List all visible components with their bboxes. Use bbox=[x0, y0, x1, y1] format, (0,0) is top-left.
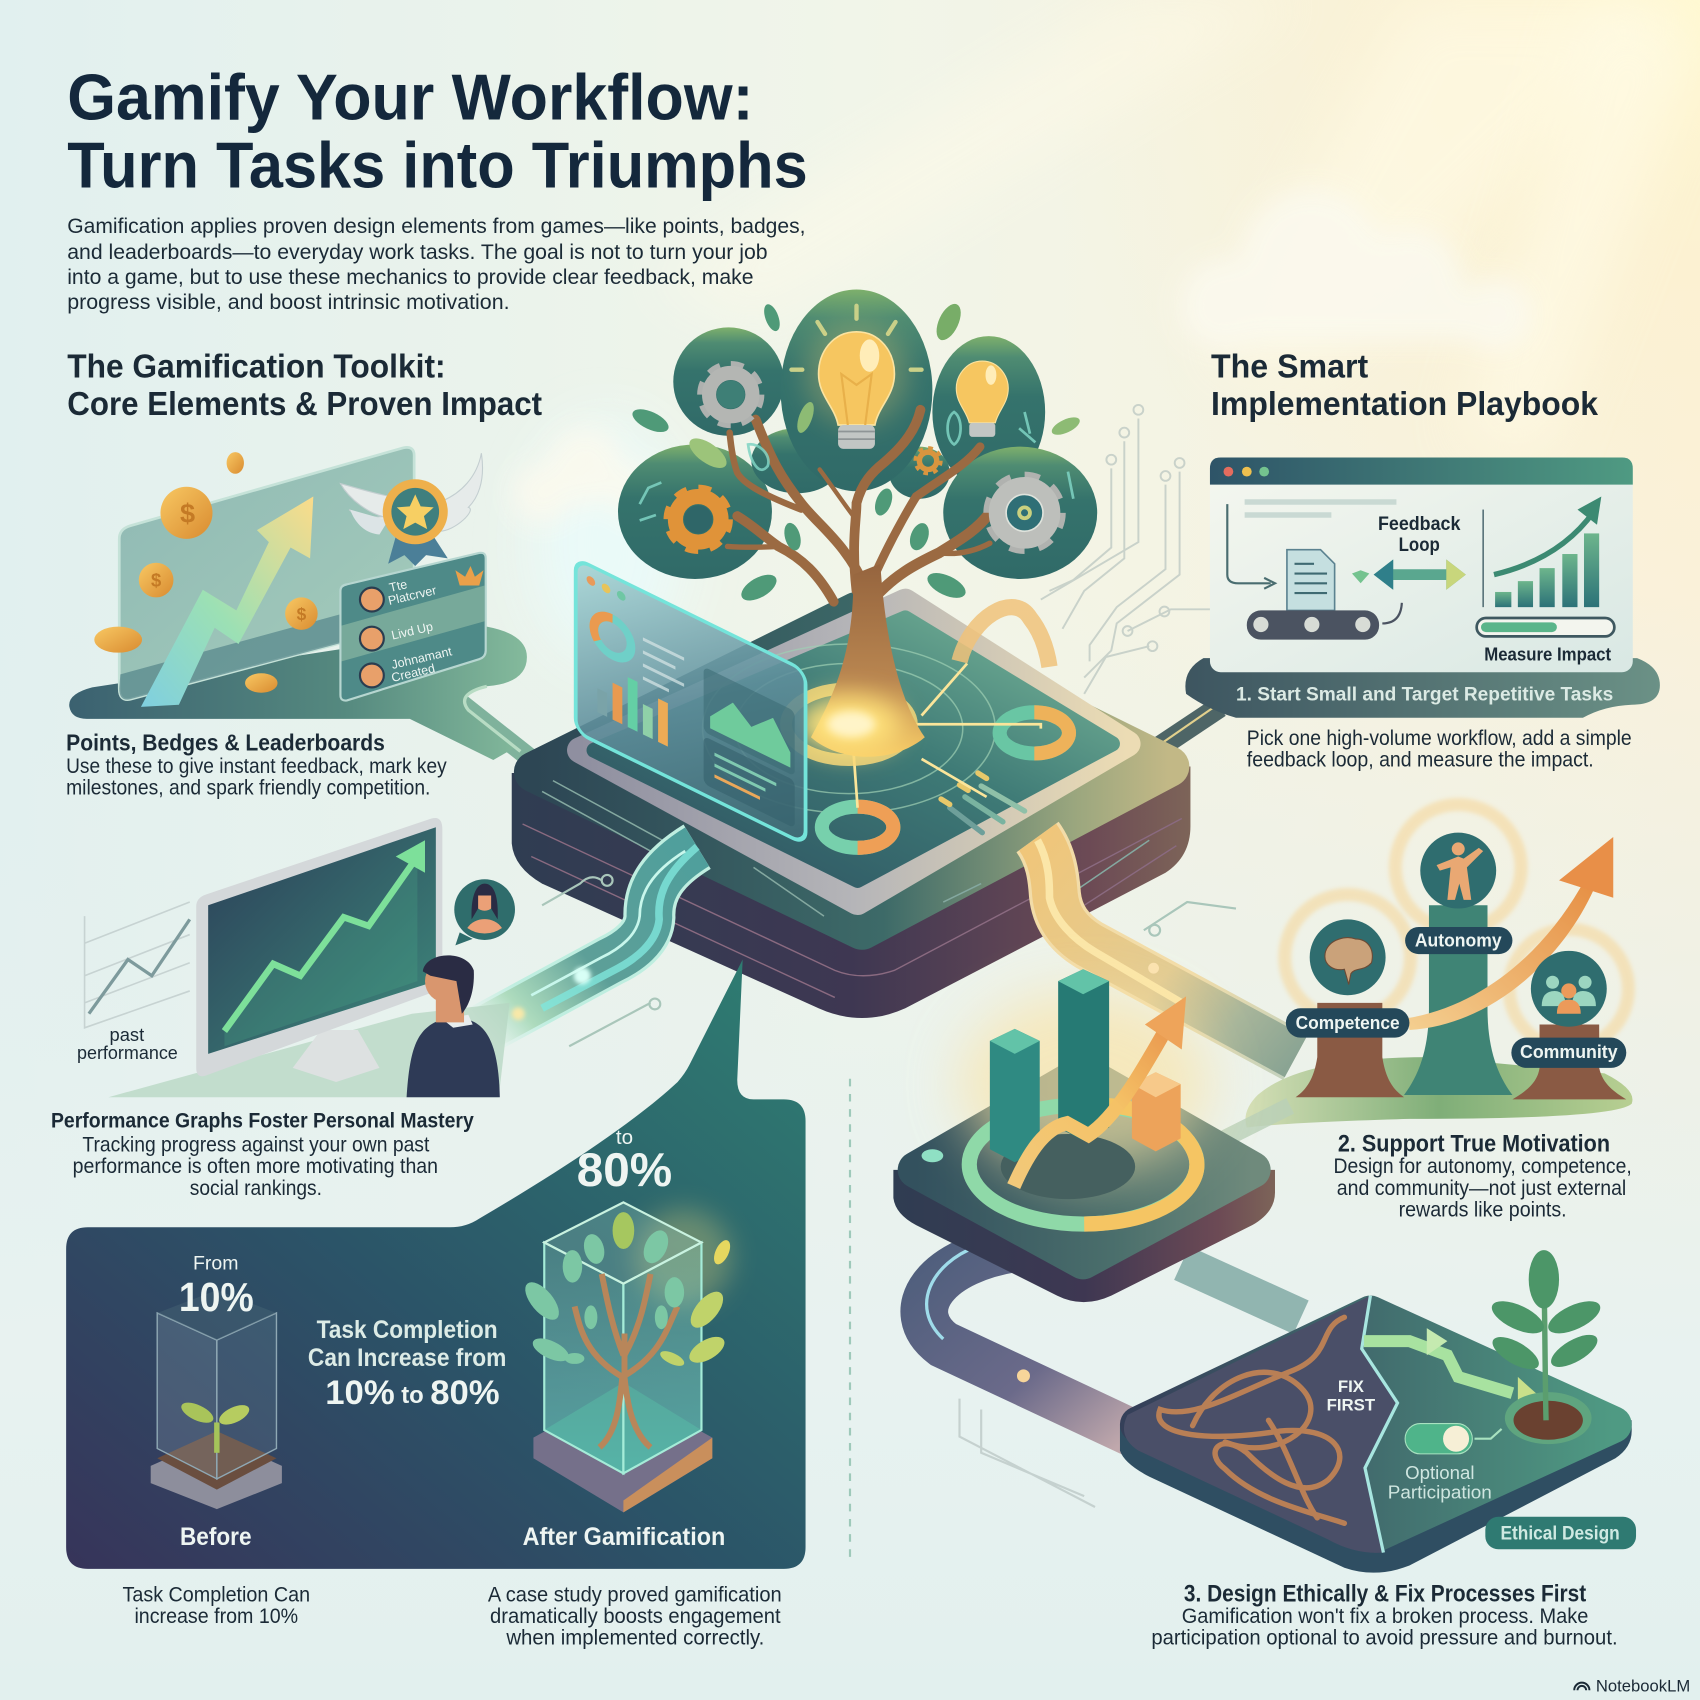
grey gear bbox=[703, 366, 759, 423]
window dots bbox=[587, 575, 626, 602]
rising arrow bbox=[141, 497, 313, 707]
text: points badges: Use these to give instant feedback, mark key bbox=[66, 755, 447, 778]
rank labels: Tte bbox=[388, 577, 409, 595]
intro paragraph bbox=[67, 213, 806, 314]
panel headline bbox=[308, 1316, 506, 1412]
glass dashboard panel bbox=[576, 558, 806, 844]
text: past performance label bbox=[77, 1024, 178, 1063]
panel headline: 80% bbox=[430, 1374, 500, 1412]
gold flow road bbox=[1038, 837, 1296, 1057]
bar one bbox=[990, 1029, 1040, 1162]
glow bbox=[960, 992, 1209, 1176]
panel headline: 10% bbox=[325, 1374, 395, 1412]
small orange gear bbox=[916, 449, 940, 473]
ethical design pill: Ethical Design bbox=[1501, 1524, 1620, 1545]
competence pill: Competence bbox=[1296, 1012, 1400, 1033]
plate top bbox=[1138, 1314, 1613, 1534]
green path arrow bbox=[1364, 1328, 1540, 1409]
base glow bbox=[797, 696, 901, 752]
intro paragraph: progress visible, and boost intrinsic motivation. bbox=[67, 289, 510, 314]
rank labels: Platcrver bbox=[387, 583, 438, 608]
platform rim bbox=[580, 602, 1128, 902]
optional participation label bbox=[1388, 1462, 1492, 1502]
text: step 1 title: 1. Start Small and Target Repetitive Tasks bbox=[1236, 683, 1613, 705]
center stump bbox=[1404, 905, 1512, 1095]
connector: step 1 to platform bbox=[1151, 707, 1220, 752]
leaderboard card bbox=[340, 553, 486, 701]
platform middle layer bbox=[535, 613, 1169, 929]
before percent: 10% bbox=[179, 1274, 254, 1320]
avatar bubble bbox=[454, 879, 515, 945]
text: before caption: Task Completion Can bbox=[123, 1583, 310, 1606]
bar three bbox=[1132, 1072, 1181, 1151]
performance graph illustration bbox=[85, 818, 515, 1097]
competence sphere bbox=[1310, 919, 1386, 995]
text: step 3: 3. Design Ethically & Fix Processes First bbox=[1184, 1580, 1586, 1607]
text: step 1 body bbox=[1247, 727, 1632, 772]
after percent: 80% bbox=[577, 1144, 672, 1197]
ring bbox=[969, 1105, 1197, 1224]
text: performance graphs: performance is often more motivating than bbox=[73, 1155, 438, 1178]
text: step 2: Design for autonomy, competence, bbox=[1334, 1155, 1632, 1178]
glow lines bbox=[853, 664, 1041, 808]
text: performance graphs: Tracking progress against your own past bbox=[82, 1133, 429, 1156]
coin symbols bbox=[151, 498, 307, 624]
NotebookLM mark: NotebookLM bbox=[1596, 1676, 1690, 1695]
crown bbox=[455, 566, 484, 585]
large grey gear bbox=[990, 478, 1059, 548]
text: case study: dramatically boosts engagement bbox=[490, 1605, 781, 1628]
optional participation label: Participation bbox=[1388, 1481, 1492, 1502]
large bulb bbox=[804, 322, 909, 449]
central platform bbox=[482, 602, 1296, 1057]
leaves bbox=[629, 300, 1082, 606]
seam bbox=[1362, 1296, 1398, 1553]
left stump bbox=[1296, 1003, 1404, 1097]
orange gear bbox=[669, 490, 727, 549]
text: feedback loop: Feedback bbox=[1378, 513, 1461, 535]
community sphere bbox=[1531, 951, 1607, 1027]
browser dots bbox=[1224, 467, 1269, 476]
monitor trend line bbox=[224, 840, 425, 1046]
competence pill bbox=[1286, 1008, 1409, 1038]
text: step 2: and community—not just external bbox=[1337, 1177, 1626, 1200]
platform marks bbox=[941, 773, 1025, 833]
before caption: Before bbox=[180, 1523, 252, 1551]
plant bbox=[1487, 1250, 1605, 1420]
heading: toolkit: Core Elements & Proven Impact bbox=[67, 386, 542, 423]
heading: toolkit: The Gamification Toolkit: bbox=[67, 348, 446, 385]
text: performance graphs: Performance Graphs Foster Personal Mastery bbox=[51, 1108, 474, 1133]
text: performance graphs bbox=[51, 1108, 474, 1200]
branches bbox=[727, 410, 990, 602]
text: step 3 bbox=[1151, 1580, 1618, 1650]
text: step 3: participation optional to avoid pressure and burnout. bbox=[1151, 1627, 1618, 1650]
side wall bbox=[893, 1170, 1275, 1302]
dark half bbox=[1124, 1296, 1398, 1553]
after glass cube with tree bbox=[519, 1202, 733, 1512]
thin road traces bbox=[542, 875, 1236, 1046]
dashboard bars bbox=[597, 662, 668, 747]
screen arcs bbox=[703, 644, 995, 813]
text: step 2: 2. Support True Motivation bbox=[1338, 1130, 1610, 1157]
after label to: to bbox=[616, 1126, 633, 1149]
text: step 2: rewards like points. bbox=[1399, 1198, 1567, 1221]
step 1 banner bbox=[1185, 658, 1660, 718]
cloud background bbox=[512, 189, 1533, 524]
teal flow road bbox=[482, 847, 697, 1030]
monitor frame bbox=[196, 818, 442, 1076]
text: step 2 bbox=[1334, 1130, 1632, 1221]
text: points badges bbox=[66, 729, 447, 800]
bulb rays bbox=[791, 306, 922, 370]
circuit lines bbox=[1041, 405, 1210, 694]
top surface bbox=[916, 1073, 1252, 1261]
coin symbols: $ bbox=[297, 604, 307, 624]
rank labels: Created bbox=[390, 661, 436, 685]
platform base layer bbox=[512, 767, 1190, 1018]
monitor screen bbox=[208, 827, 436, 1054]
ground wedge bbox=[108, 1003, 510, 1097]
intro paragraph: Gamification applies proven design elements from games—like points, badges, bbox=[67, 213, 806, 238]
text: case study: A case study proved gamification bbox=[488, 1583, 782, 1606]
intro paragraph: into a game, but to use these mechanics to provide clear feedback, make bbox=[67, 264, 754, 289]
lower ring bbox=[822, 807, 893, 848]
right stump bbox=[1512, 1025, 1626, 1099]
small glows bbox=[922, 1149, 943, 1162]
ethical design pill bbox=[1485, 1517, 1636, 1549]
FIX FIRST label: FIX bbox=[1338, 1377, 1365, 1396]
past performance chart bbox=[85, 902, 190, 1028]
tree bbox=[618, 289, 1097, 757]
FIX FIRST label: FIRST bbox=[1327, 1396, 1376, 1415]
tangled wire bbox=[1159, 1317, 1344, 1523]
bar two bbox=[1058, 969, 1109, 1141]
text: before caption bbox=[123, 1583, 310, 1628]
glass board bbox=[119, 447, 414, 700]
heading: playbook: Implementation Playbook bbox=[1211, 386, 1598, 423]
text: step 1 body: Pick one high-volume workflow, add a simple bbox=[1247, 727, 1632, 750]
middle platform bbox=[893, 969, 1275, 1302]
heading: playbook bbox=[1211, 348, 1598, 423]
toggle switch bbox=[1405, 1424, 1502, 1454]
title: Turn Tasks into Triumphs bbox=[67, 129, 808, 202]
optional participation label: Optional bbox=[1405, 1462, 1474, 1483]
dashed divider bbox=[849, 1079, 851, 1561]
case study panel bbox=[66, 960, 806, 1569]
avatars bbox=[360, 588, 384, 687]
before label from: From bbox=[193, 1253, 239, 1275]
connector: toolkit to platform bbox=[460, 703, 548, 772]
bottom plate bbox=[1120, 1250, 1636, 1573]
text: step 1 body: feedback loop, and measure the impact. bbox=[1247, 749, 1594, 772]
before glass cube bbox=[151, 1290, 282, 1509]
community pill: Community bbox=[1520, 1041, 1618, 1062]
platform screen bbox=[594, 618, 1112, 880]
FIX FIRST label bbox=[1327, 1377, 1376, 1415]
donut on platform bbox=[1000, 712, 1069, 754]
text: past performance label: past bbox=[110, 1024, 144, 1045]
title: Gamify Your Workflow: bbox=[67, 60, 754, 133]
heading: toolkit bbox=[67, 348, 542, 423]
orange rising arrow bbox=[1408, 837, 1613, 1030]
text: step 3: Gamification won't fix a broken process. Make bbox=[1182, 1605, 1588, 1628]
coins bbox=[94, 452, 318, 693]
browser header bbox=[1210, 458, 1633, 485]
autonomy pill: Autonomy bbox=[1415, 929, 1502, 950]
impact chart bbox=[1483, 497, 1601, 607]
rank labels bbox=[387, 577, 454, 685]
coin symbols: $ bbox=[180, 498, 195, 529]
autonomy pill bbox=[1405, 927, 1512, 954]
small tech glyphs bbox=[640, 412, 1073, 520]
connector to bottom plate bbox=[1182, 1263, 1301, 1317]
medal bbox=[340, 453, 483, 566]
monitor stand bbox=[293, 1030, 379, 1082]
rank labels: Livd Up bbox=[390, 619, 434, 643]
panel headline: Can Increase from bbox=[308, 1344, 506, 1372]
glow rings bbox=[1285, 804, 1628, 1048]
dashboard line chart bbox=[704, 667, 795, 776]
connector highlight bbox=[465, 686, 520, 751]
heading: playbook: The Smart bbox=[1211, 348, 1368, 385]
text: performance graphs: social rankings. bbox=[190, 1177, 322, 1200]
text: past performance label: performance bbox=[77, 1042, 178, 1063]
progress bar bbox=[1477, 618, 1614, 636]
text: case study: when implemented correctly. bbox=[505, 1627, 764, 1650]
coin symbols: $ bbox=[151, 570, 161, 591]
road loop bbox=[924, 1247, 1133, 1507]
text: points badges: milestones, and spark friendly competition. bbox=[66, 777, 430, 800]
small bulb bbox=[956, 361, 1008, 437]
panel headline: Task Completion bbox=[317, 1316, 498, 1344]
dashboard list bbox=[704, 736, 795, 828]
crown blobs bbox=[618, 289, 1097, 579]
person bbox=[407, 955, 500, 1097]
document bbox=[1287, 550, 1335, 610]
text: feedback loop: Loop bbox=[1399, 534, 1440, 556]
community pill bbox=[1511, 1038, 1626, 1068]
rising arrow bbox=[1014, 996, 1186, 1186]
autonomy sphere bbox=[1420, 833, 1496, 909]
text: before caption: increase from 10% bbox=[134, 1605, 298, 1628]
title bbox=[67, 60, 808, 202]
golden ribbon bbox=[960, 607, 1049, 667]
after caption: After Gamification bbox=[523, 1523, 725, 1551]
step 2 illustration bbox=[1245, 804, 1632, 1128]
text: points badges: Points, Bedges & Leaderboards bbox=[66, 729, 385, 755]
feedback double arrow bbox=[1374, 559, 1466, 590]
dashboard donut bbox=[594, 610, 631, 665]
plate side bbox=[1120, 1420, 1632, 1573]
connector to step 2 bbox=[1225, 1106, 1290, 1138]
flow arrow into doc bbox=[1227, 504, 1275, 589]
intro paragraph: and leaderboards—to everyday work tasks. The goal is not to turn your job bbox=[67, 239, 768, 264]
trunk bbox=[811, 564, 925, 757]
rank labels: Johnamant bbox=[390, 644, 454, 672]
step 1 illustration bbox=[1185, 458, 1660, 718]
browser window bbox=[1210, 458, 1633, 672]
ground bbox=[1245, 1057, 1632, 1128]
toolkit base bbox=[69, 627, 527, 760]
soil hole bbox=[1505, 1392, 1592, 1444]
text: measure impact: Measure Impact bbox=[1484, 643, 1611, 664]
points badges leaderboards illustration bbox=[69, 447, 527, 760]
panel headline: to bbox=[401, 1382, 424, 1409]
conveyor bbox=[1247, 603, 1402, 640]
board shadow band bbox=[119, 594, 414, 700]
text: case study bbox=[488, 1583, 782, 1650]
glow ring bbox=[786, 688, 912, 760]
text: feedback loop bbox=[1378, 513, 1461, 556]
